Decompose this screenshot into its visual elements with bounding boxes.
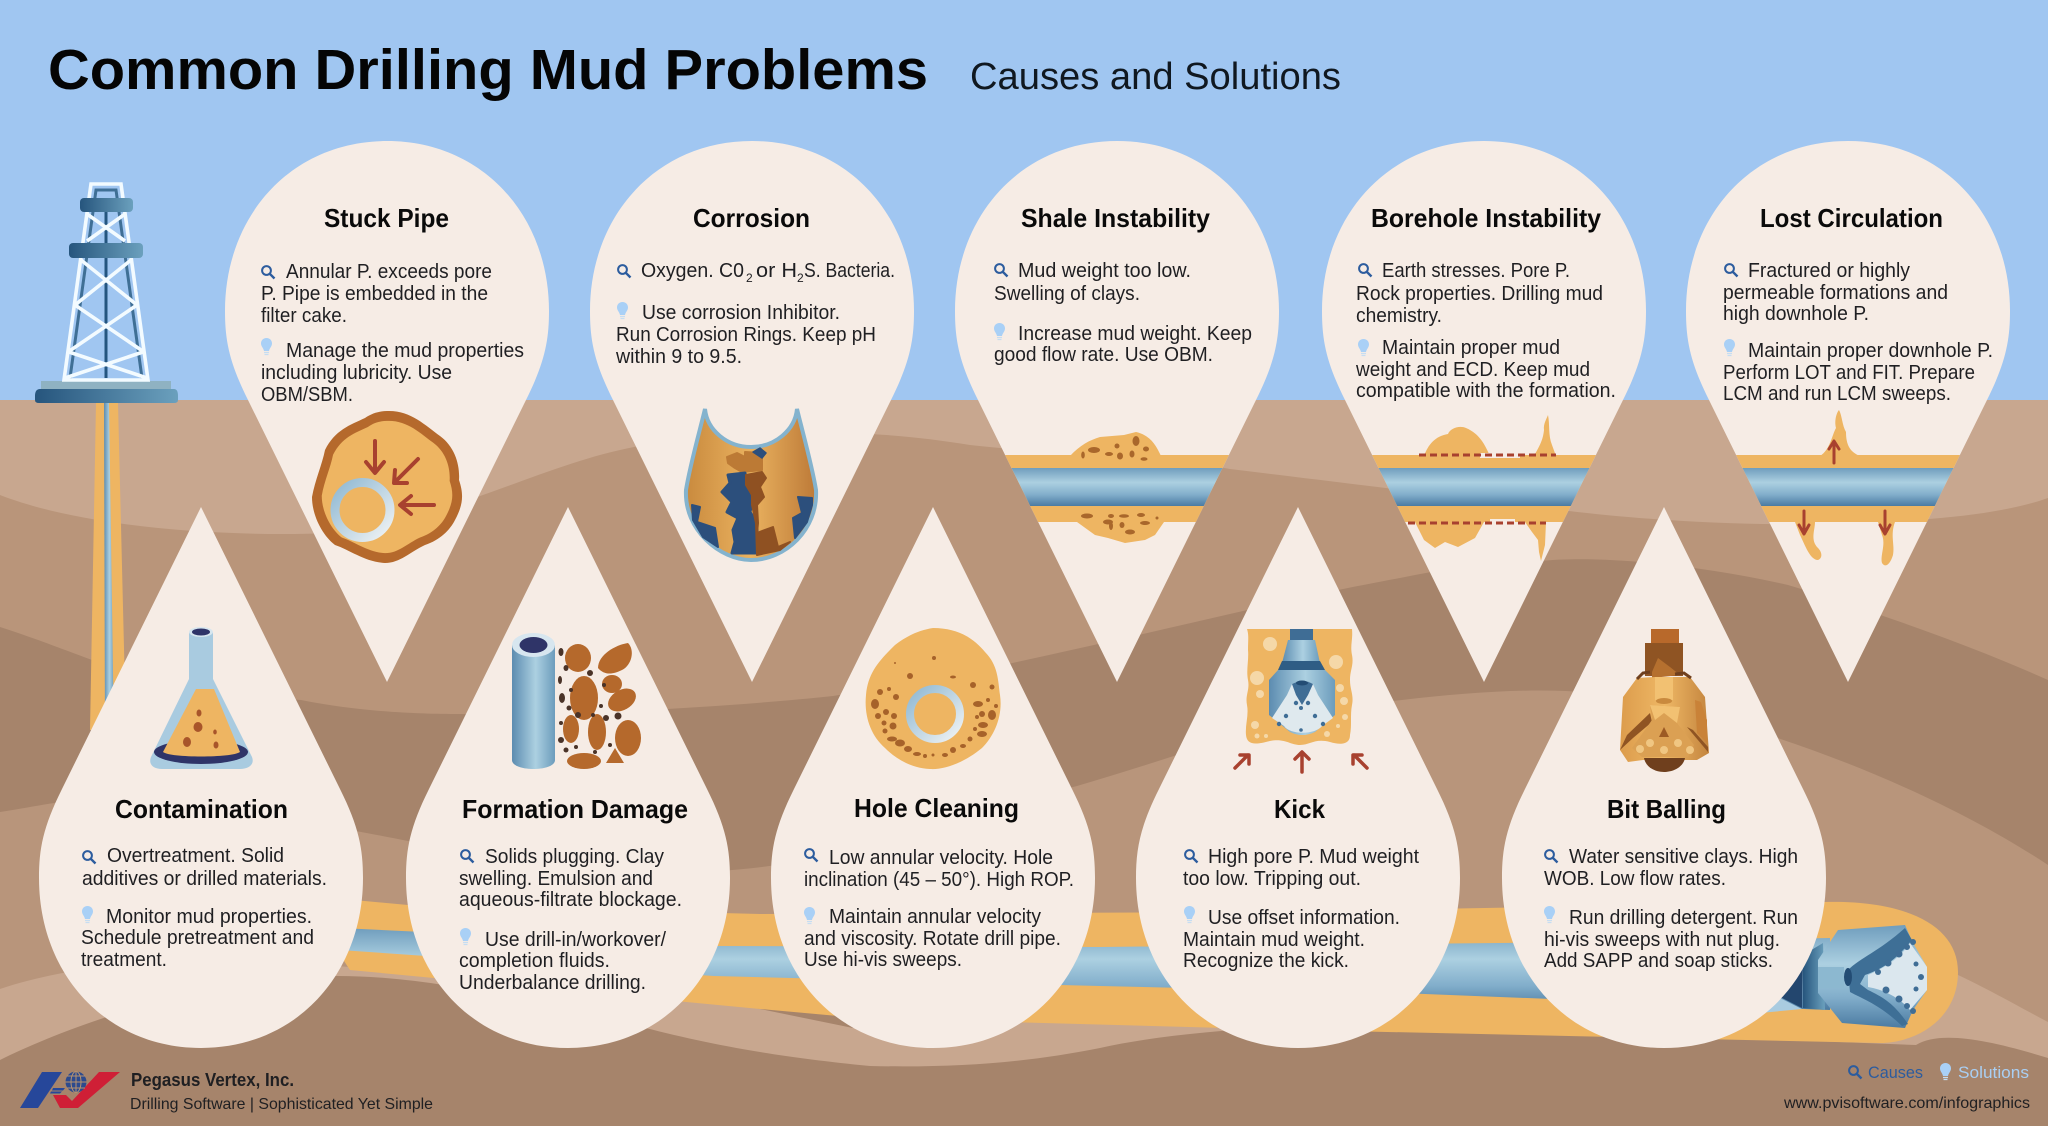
solutions text: hi-vis sweeps with nut plug. (1544, 929, 1780, 951)
causes text: Overtreatment. Solid (107, 845, 284, 867)
company name: Pegasus Vertex, Inc. (131, 1070, 294, 1090)
causes text: swelling. Emulsion and (459, 868, 653, 890)
causes text: S. Bacteria. (804, 260, 895, 282)
causes text: inclination (45 – 50°). High ROP. (804, 869, 1074, 891)
icon: corroded pipe (686, 409, 816, 560)
legend: Causes (1868, 1063, 1923, 1082)
solutions text: weight and ECD. Keep mud (1355, 359, 1590, 381)
causes text: High pore P. Mud weight (1208, 846, 1419, 868)
solutions text: Recognize the kick. (1183, 950, 1349, 972)
solutions text: Maintain proper downhole P. (1748, 340, 1993, 362)
heading: Hole Cleaning (854, 793, 1019, 823)
legend (1849, 1063, 2029, 1082)
icon: stuck pipe cross-section (312, 411, 462, 563)
subtitle: Causes and Solutions (970, 56, 1341, 98)
solutions text: Manage the mud properties (286, 340, 524, 362)
title: Common Drilling Mud Problems (48, 38, 928, 102)
solutions text: Monitor mud properties. (106, 906, 312, 928)
causes text: Oxygen. C0 (641, 260, 744, 282)
heading: Kick (1274, 794, 1325, 824)
icon: balled drill bit (1620, 629, 1709, 772)
solutions text: Maintain proper mud (1382, 337, 1560, 359)
causes text: Solids plugging. Clay (485, 846, 664, 868)
causes text: Swelling of clays. (994, 283, 1140, 305)
horizontal drill bit (1760, 925, 1927, 1028)
heading: Stuck Pipe (324, 203, 449, 233)
icon: borehole breakouts (1372, 415, 1596, 561)
solutions text: and viscosity. Rotate drill pipe. (804, 928, 1061, 950)
solutions text: Maintain annular velocity (829, 906, 1041, 928)
solutions text: Increase mud weight. Keep (1018, 323, 1252, 345)
vertical wellbore and drill pipe (90, 403, 126, 740)
solutions text: OBM/SBM. (261, 384, 353, 406)
solutions text: Use offset information. (1208, 907, 1400, 929)
causes text: or H (756, 260, 797, 282)
causes text: aqueous-filtrate blockage. (459, 889, 682, 911)
causes text (82, 845, 327, 890)
heading: Corrosion (693, 203, 810, 233)
solutions text (1723, 339, 1993, 405)
panel: Corrosion (590, 141, 914, 682)
causes text: Low annular velocity. Hole (829, 847, 1053, 869)
causes text: chemistry. (1356, 305, 1442, 327)
heading: Contamination (115, 794, 288, 824)
solutions text: Run drilling detergent. Run (1569, 907, 1798, 929)
solutions text: treatment. (81, 949, 167, 971)
causes text: Mud weight too low. (1018, 260, 1191, 282)
solutions text: Use corrosion Inhibitor. (642, 302, 840, 324)
logo: Pegasus Vertex (20, 1072, 120, 1108)
solutions text (81, 906, 314, 971)
legend: Solutions (1958, 1063, 2029, 1082)
panel: Kick (1136, 507, 1460, 1048)
solutions text: Use drill-in/workover/ (485, 929, 666, 951)
icon: cuttings around pipe (866, 628, 1001, 769)
solutions text: completion fluids. (459, 950, 610, 972)
causes text: filter cake. (261, 305, 347, 327)
panel: Formation Damage (406, 507, 730, 1048)
causes text: Fractured or highly (1748, 260, 1910, 282)
solutions text: Perform LOT and FIT. Prepare (1723, 362, 1975, 384)
solutions text: Underbalance drilling. (459, 972, 646, 994)
heading: Lost Circulation (1760, 203, 1943, 233)
solutions text: good flow rate. Use OBM. (994, 344, 1213, 366)
ground strata (0, 400, 2048, 1126)
causes text (261, 261, 492, 327)
solutions text (1355, 337, 1616, 402)
causes text (1356, 260, 1603, 327)
solutions text (261, 338, 524, 406)
panel: Borehole Instability (1322, 141, 1650, 682)
causes text (994, 260, 1191, 305)
solutions text: Add SAPP and soap sticks. (1544, 950, 1773, 972)
solutions text: including lubricity. Use (261, 362, 452, 384)
solutions text: Maintain mud weight. (1183, 929, 1365, 951)
causes text (804, 847, 1074, 891)
website url: www.pvisoftware.com/infographics (1783, 1095, 2030, 1112)
panel: Lost Circulation (1686, 141, 2020, 682)
solutions text (615, 302, 876, 368)
causes text: Water sensitive clays. High (1569, 846, 1798, 868)
causes text: 2 (797, 271, 804, 285)
solutions text (1544, 906, 1798, 972)
horizontal wellbore (300, 895, 1958, 1043)
causes text (618, 260, 895, 285)
solutions text: Run Corrosion Rings. Keep pH (616, 324, 876, 346)
icon: fractures with lost mud (1736, 410, 1960, 566)
causes text: additives or drilled materials. (82, 868, 327, 890)
solutions text: within 9 to 9.5. (615, 346, 742, 368)
causes text: high downhole P. (1723, 303, 1869, 325)
tagline: Drilling Software | Sophisticated Yet Simple (130, 1096, 433, 1113)
solutions text (459, 928, 666, 994)
icon: pipe and plugged formation (512, 633, 641, 769)
heading: Formation Damage (462, 794, 688, 824)
causes text: Rock properties. Drilling mud (1356, 283, 1603, 305)
causes text: permeable formations and (1723, 282, 1948, 304)
heading: Bit Balling (1607, 794, 1726, 824)
solutions text (994, 323, 1252, 366)
icon: drilling derrick (35, 184, 178, 403)
panel: Stuck Pipe (225, 141, 549, 682)
causes text (1183, 846, 1419, 890)
causes text: too low. Tripping out. (1183, 868, 1361, 890)
heading: Borehole Instability (1371, 203, 1602, 233)
causes text: Earth stresses. Pore P. (1382, 260, 1570, 282)
causes text (459, 846, 682, 911)
causes text: Annular P. exceeds pore (286, 261, 492, 283)
heading: Shale Instability (1021, 203, 1211, 233)
icon: flask (150, 627, 253, 769)
icon: drill bit with influx (1235, 629, 1367, 772)
panel: Bit Balling (1502, 507, 1826, 1048)
solutions text: LCM and run LCM sweeps. (1723, 383, 1951, 405)
solutions text (1183, 906, 1400, 972)
panel: Hole Cleaning (771, 507, 1095, 1048)
solutions text: Schedule pretreatment and (81, 927, 314, 949)
icon: swollen shale wellbore (1005, 432, 1229, 543)
causes text: WOB. Low flow rates. (1544, 868, 1726, 890)
solutions text: Use hi-vis sweeps. (804, 949, 962, 971)
solutions text: compatible with the formation. (1356, 380, 1616, 402)
panel: Shale Instability (955, 141, 1280, 682)
solutions text (804, 906, 1061, 971)
panel: Contamination (39, 507, 363, 1048)
causes text: 2 (746, 271, 753, 285)
causes text: P. Pipe is embedded in the (261, 283, 488, 305)
causes text (1723, 260, 1948, 325)
causes text (1544, 846, 1798, 890)
